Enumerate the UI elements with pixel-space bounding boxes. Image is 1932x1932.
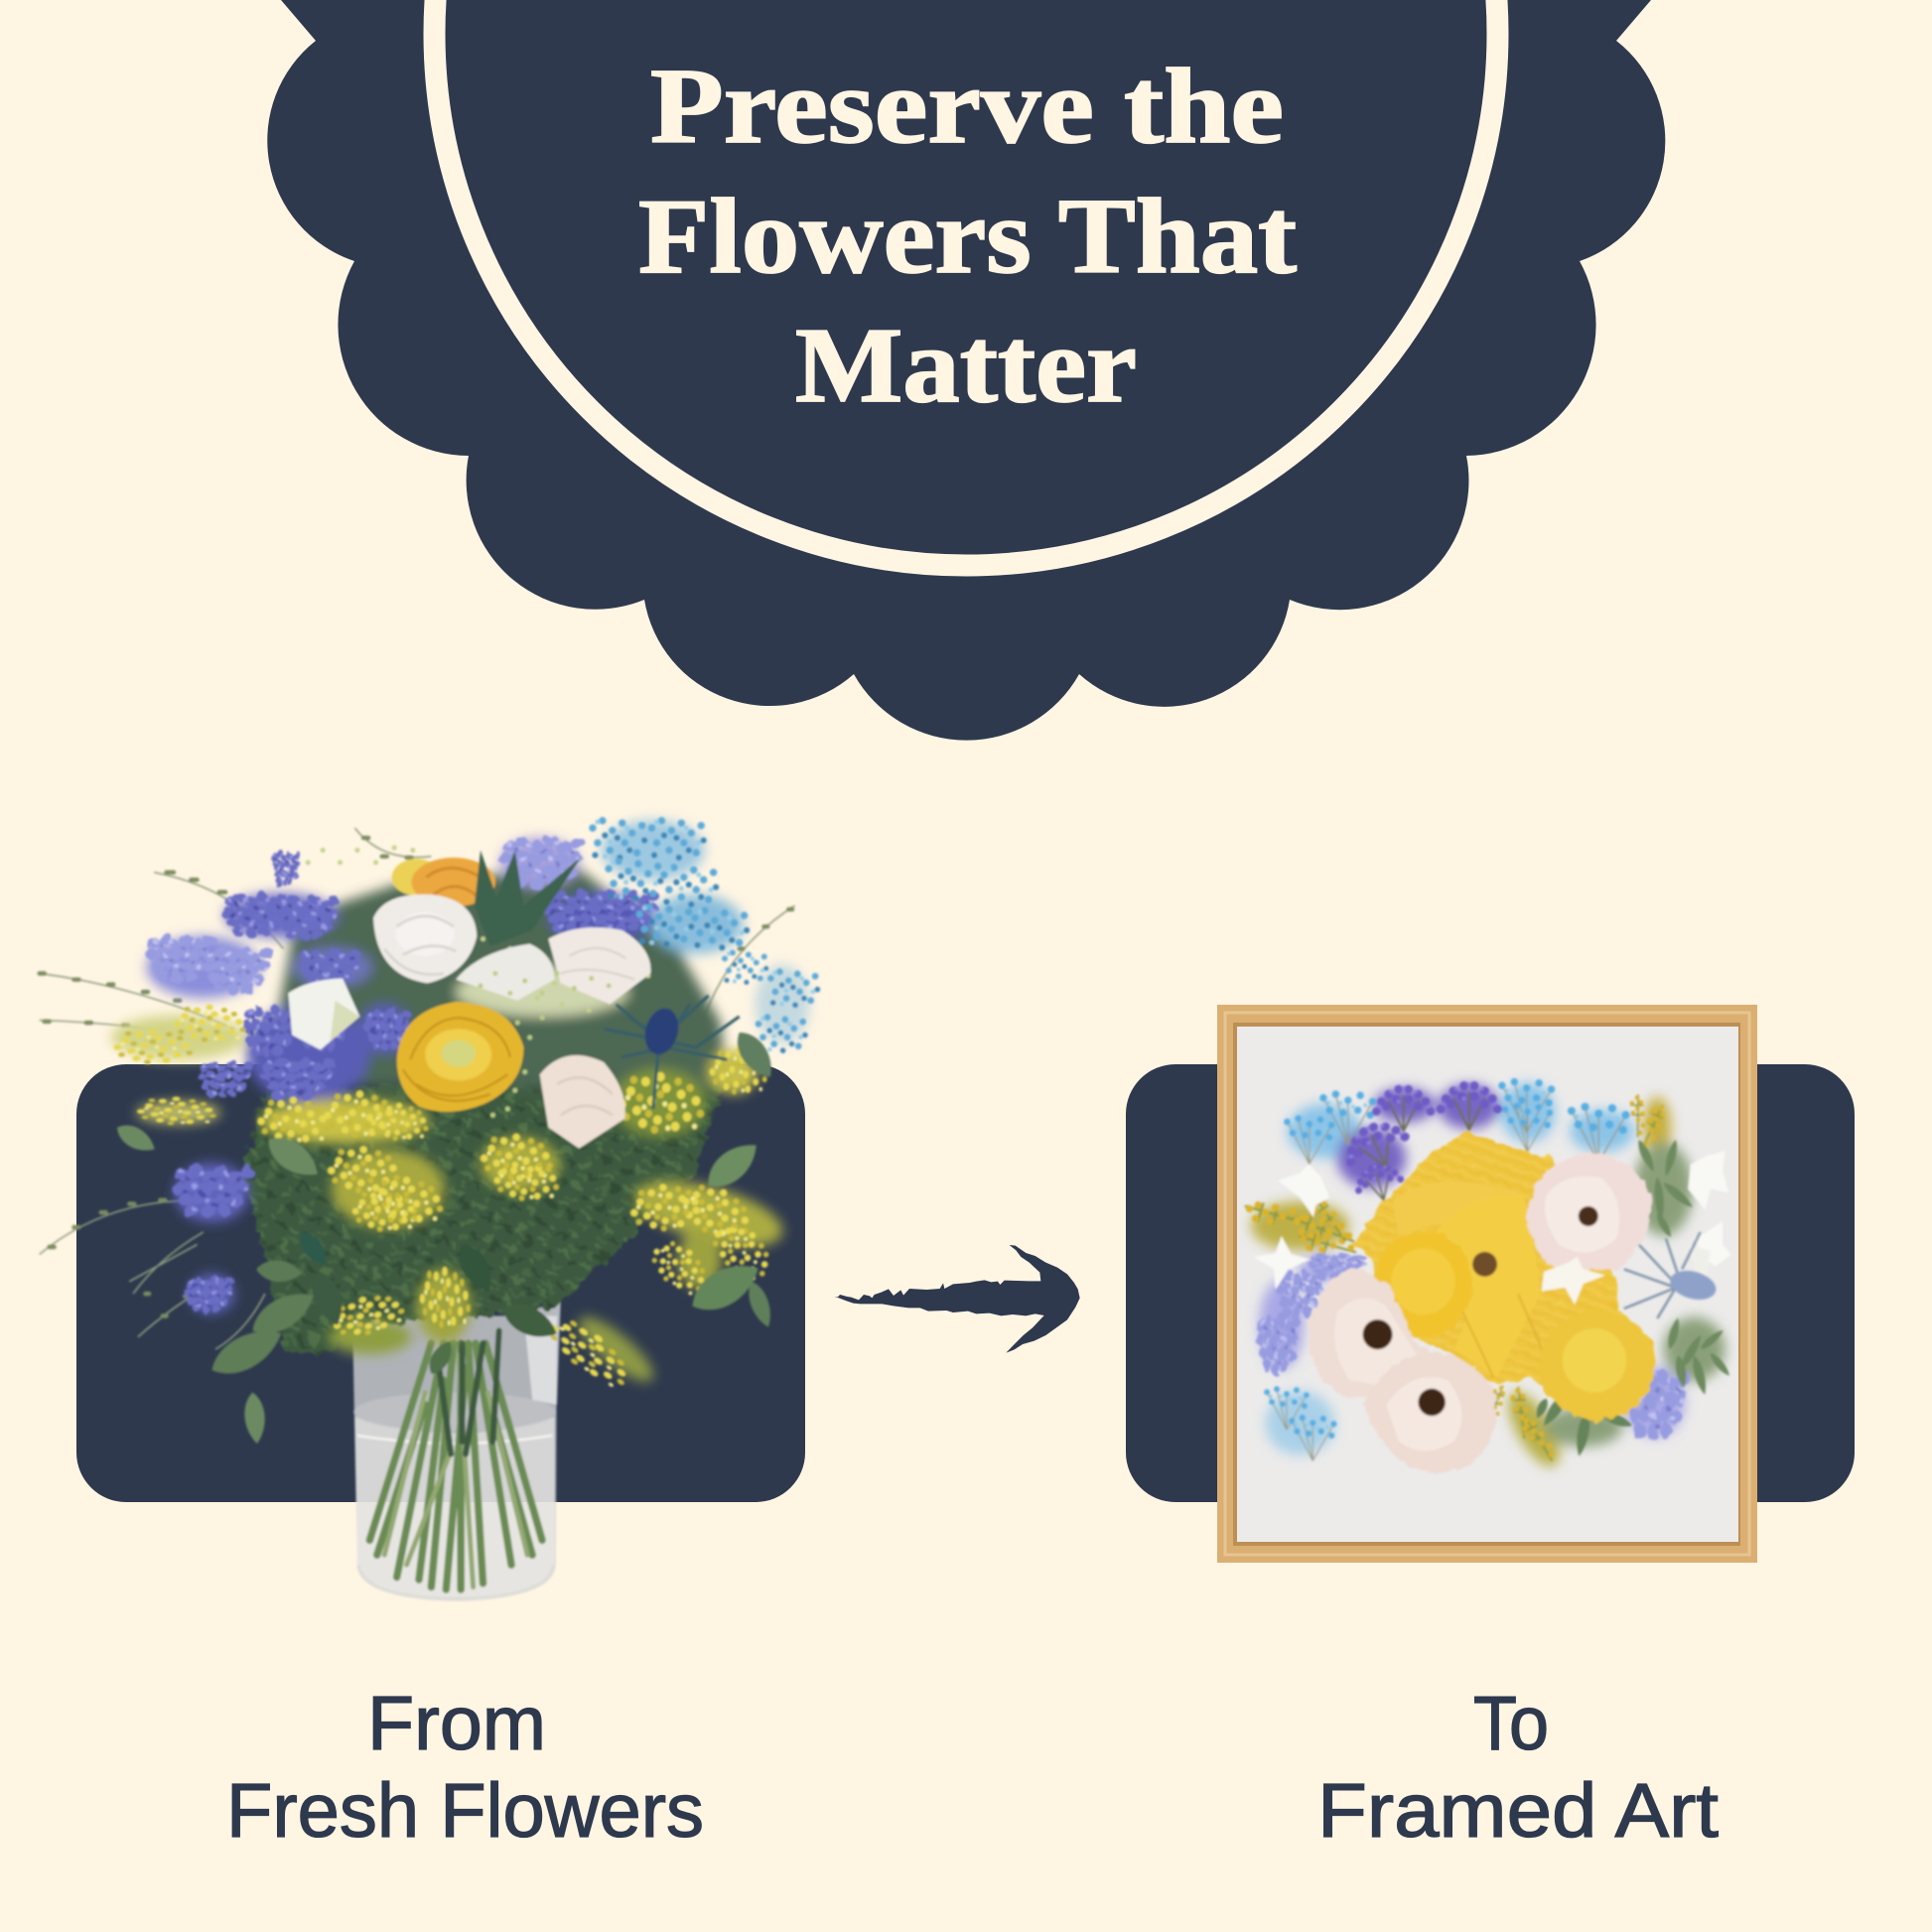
pressed green sprigs and leaves (1533, 1138, 1732, 1457)
pale green flecks (308, 848, 648, 1011)
pressed thistle (1624, 1232, 1720, 1318)
panel: backing left (76, 1064, 805, 1502)
caption: from fresh flowers: From (367, 1681, 546, 1766)
paper mat (1237, 1027, 1738, 1542)
vase (352, 1302, 561, 1599)
pressed mimosa sprigs (1246, 1095, 1664, 1460)
pressed pink flowers (1308, 1154, 1652, 1473)
pressed white flowers (1253, 1151, 1731, 1290)
title: Preserve the (650, 48, 1284, 166)
caption: to framed art: Framed Art (1317, 1768, 1719, 1854)
goldenrod clusters (117, 1007, 776, 1390)
title (638, 48, 1297, 425)
caption: from fresh flowers (226, 1681, 704, 1854)
pressed flowers (1246, 1082, 1732, 1474)
spiky greens (475, 850, 582, 946)
arrow (835, 1245, 1080, 1353)
blurred colour tones (111, 821, 809, 1391)
caption: to framed art: To (1473, 1681, 1549, 1766)
lavender flowers (152, 842, 654, 1310)
lower foliage mass (241, 1072, 727, 1355)
blue baby's breath (593, 821, 817, 1050)
caption: to framed art (1317, 1681, 1719, 1854)
pressed yellow petals (1354, 1131, 1655, 1421)
scalloped title badge (267, 0, 1665, 741)
wooden frame (1217, 1005, 1757, 1563)
wispy sprays (40, 828, 795, 1349)
pressed purple statice (1341, 1084, 1497, 1205)
panel: backing right (1126, 1064, 1855, 1502)
pressed blue gypsophila (1267, 1082, 1626, 1460)
orange rose (392, 858, 495, 906)
illustration: fresh bouquet in vase (40, 821, 817, 1599)
pressed lilac statice (1260, 1257, 1684, 1433)
pale sprays over roses (481, 973, 609, 1115)
caption: from fresh flowers: Fresh Flowers (226, 1768, 704, 1854)
cream ring (435, 0, 1497, 566)
yellow ranunculus (397, 1002, 523, 1112)
title: Flowers That (638, 178, 1297, 296)
blurred colour tones (1251, 1083, 1725, 1474)
vase stems (369, 1330, 542, 1589)
thistle (604, 996, 740, 1109)
leaves (112, 1026, 780, 1445)
scalloped shape (267, 0, 1665, 741)
illustration: framed pressed flowers (1217, 1005, 1757, 1563)
white roses (288, 895, 650, 1149)
title: Matter (795, 307, 1137, 425)
